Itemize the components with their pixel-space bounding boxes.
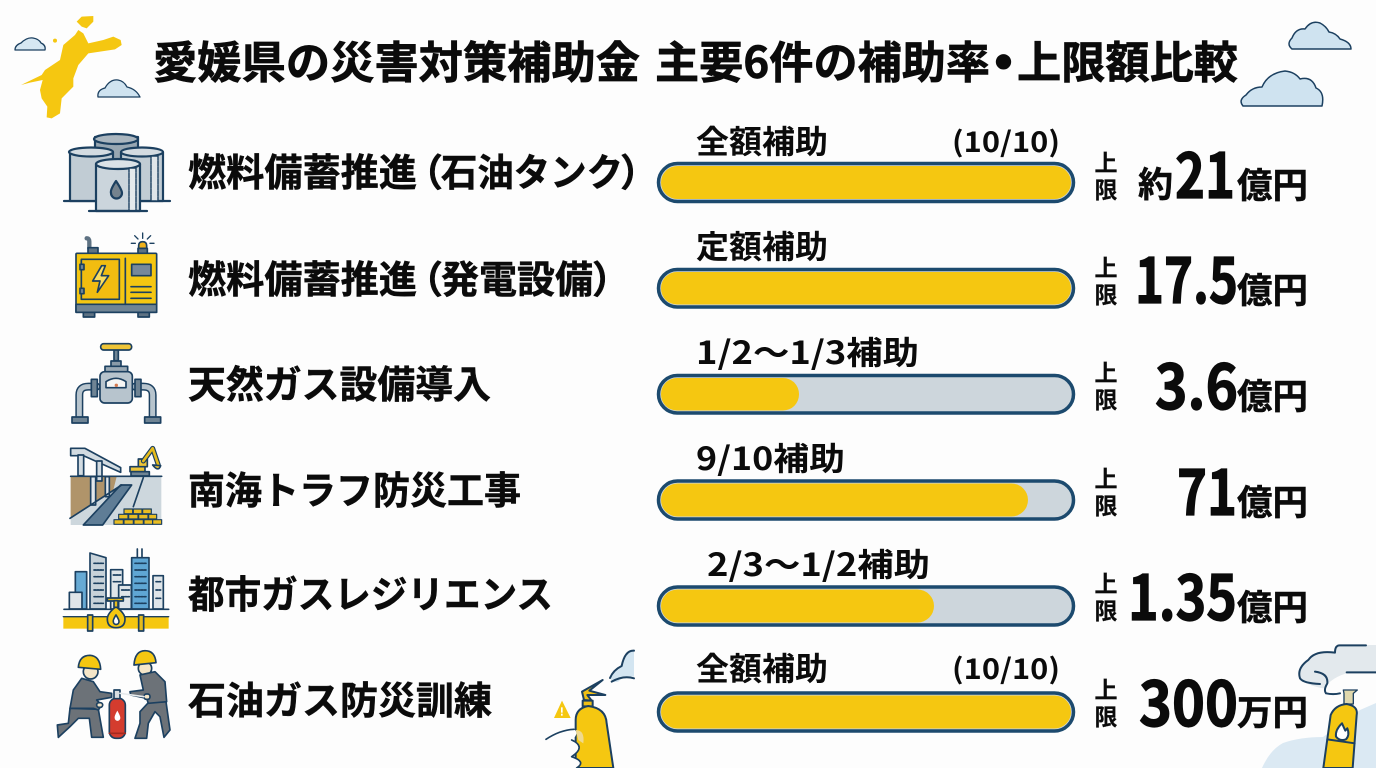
row 3: natural gas equipment	[72, 328, 1308, 427]
title: 愛媛県の災害対策補助金	[153, 27, 640, 91]
cap amount: 万円	[1237, 685, 1308, 736]
row label: 天然ガス設備導入	[188, 354, 491, 409]
cap amount: 億円	[1237, 475, 1308, 526]
icon: city and gas pipeline	[63, 549, 169, 631]
cap amount: 1.35	[1128, 548, 1237, 638]
cap label: 限	[1094, 381, 1118, 415]
row label	[188, 249, 630, 304]
cap amount: 21	[1175, 126, 1235, 216]
progress bar	[658, 376, 1074, 413]
cap amount: 億円	[1237, 580, 1308, 631]
subsidy ratio label: (10/10)	[952, 121, 1060, 161]
row 6: oil and gas disaster drills	[57, 644, 1376, 768]
row label: 石油タンク	[441, 142, 623, 197]
cap amount: 300	[1139, 654, 1238, 744]
cap label: 上	[1094, 460, 1118, 494]
cap label	[1094, 144, 1118, 205]
progress bar	[658, 270, 1074, 307]
cap amount: 71	[1177, 443, 1237, 533]
cap amount	[1139, 654, 1308, 744]
title	[153, 16, 1238, 103]
row label: 燃料備蓄推進	[188, 249, 417, 304]
cap label: 上	[1094, 354, 1118, 388]
cap amount: 17.5	[1135, 231, 1238, 321]
title: 主要6件の補助率	[655, 27, 990, 91]
subsidy type label: 9/10補助	[696, 434, 845, 480]
row label	[188, 142, 658, 197]
cap amount: 億円	[1237, 369, 1308, 420]
row label: （	[405, 249, 443, 304]
cap amount	[1177, 443, 1308, 533]
progress bar	[658, 693, 1074, 731]
row label: 都市ガスレジリエンス	[188, 564, 553, 619]
row label: 南海トラフ防災工事	[188, 460, 521, 515]
subsidy ratio label: (10/10)	[952, 648, 1060, 688]
progress bar	[658, 481, 1074, 519]
icon: small cloud top left	[15, 38, 45, 50]
subsidy type label: 全額補助	[696, 117, 828, 163]
icon: large cloud top right	[1241, 71, 1323, 106]
title: ・	[974, 16, 1034, 103]
icon: gas cylinder with smoke	[1299, 645, 1376, 768]
cap amount	[1155, 337, 1308, 427]
bottom right pale blue hill	[1262, 703, 1376, 768]
subsidy type label: 1/2～1/3補助	[696, 328, 919, 374]
icon: yellow extinguisher with warning	[546, 651, 634, 768]
row 4: Nankai Trough construction	[70, 434, 1308, 533]
cap amount: 億円	[1237, 158, 1308, 209]
cap label: 上	[1094, 144, 1118, 178]
progress bar	[658, 164, 1074, 202]
row 1: fuel storage oil tanks	[64, 117, 1308, 216]
cap amount: 約	[1138, 157, 1173, 208]
cap amount	[1138, 126, 1308, 216]
row label: ）	[620, 142, 658, 197]
cap label: 限	[1094, 171, 1118, 205]
row label: （	[405, 142, 443, 197]
icon: cloud beside title	[98, 80, 140, 97]
cap label	[1094, 354, 1118, 415]
row 5: city gas resilience	[63, 540, 1308, 638]
cap label	[1094, 249, 1118, 310]
icon: oil tanks	[64, 134, 170, 211]
icon: gas valve and meter	[72, 344, 161, 423]
cap label: 上	[1094, 671, 1118, 705]
title: 上限額比較	[1017, 27, 1238, 91]
cap label	[1094, 460, 1118, 521]
row label: 発電設備	[441, 249, 593, 304]
cap label: 上	[1094, 249, 1118, 283]
cap label: 上	[1094, 565, 1118, 599]
cap label	[1094, 565, 1118, 626]
cap amount: 億円	[1237, 263, 1308, 314]
icon: generator	[76, 233, 157, 317]
cap amount: 3.6	[1155, 337, 1238, 427]
cap label: 限	[1094, 592, 1118, 626]
icon: cloud top right	[1289, 22, 1351, 49]
icon: seawall construction site	[70, 448, 162, 525]
icon: two workers with extinguisher	[57, 651, 170, 738]
icon: Ehime prefecture map	[21, 16, 122, 118]
progress bar	[658, 587, 1074, 625]
subsidy type label: 定額補助	[696, 222, 828, 268]
cap label: 限	[1094, 698, 1118, 732]
row 2: fuel storage generator	[76, 222, 1308, 321]
row label: 石油ガス防災訓練	[188, 670, 492, 725]
row label: ）	[592, 249, 630, 304]
subsidy type label: 全額補助	[696, 644, 828, 690]
cap label: 限	[1094, 276, 1118, 310]
cap label: 限	[1094, 487, 1118, 521]
cap label	[1094, 671, 1118, 732]
subsidy type label: 2/3～1/2補助	[707, 540, 930, 586]
row label: 燃料備蓄推進	[188, 142, 417, 197]
